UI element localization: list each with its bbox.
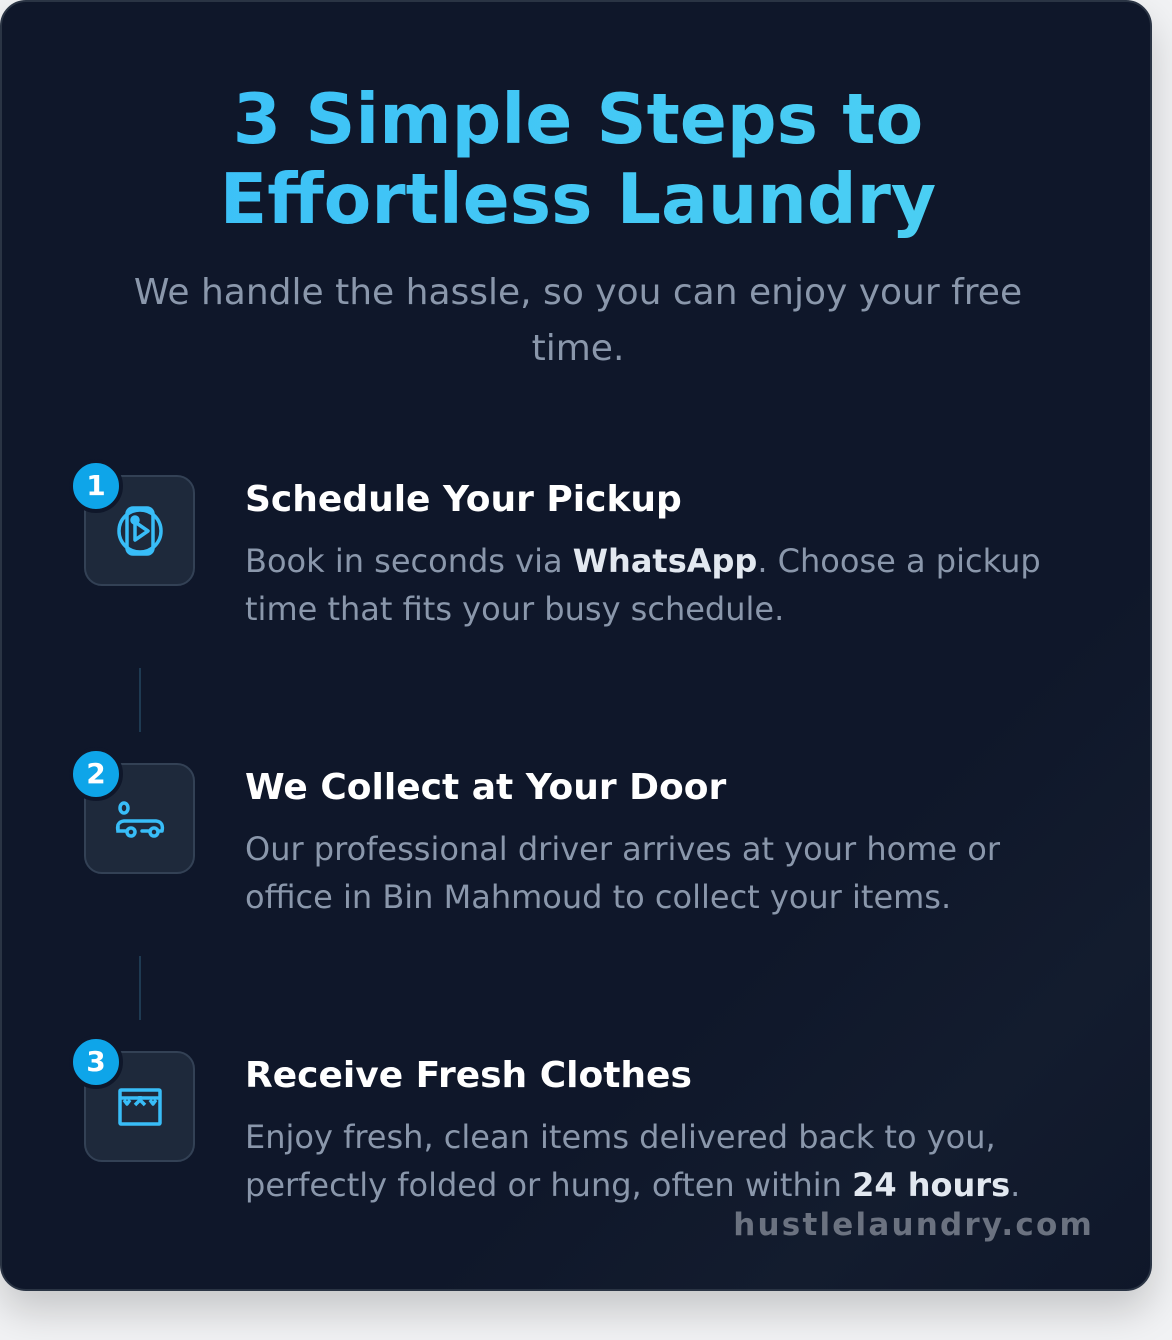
icon: wardrobe [84, 1051, 195, 1162]
text 1: Book in seconds via WhatsApp. Choose a pickup time that fits your busy schedule. [245, 542, 1041, 628]
badge 1 [69, 459, 123, 513]
badge 2: 2 [86, 757, 106, 790]
badge 1: 1 [86, 469, 106, 502]
heading 1: Schedule Your Pickup [245, 479, 682, 520]
heading 3: Receive Fresh Clothes [245, 1055, 692, 1096]
step 3 [73, 1039, 1020, 1204]
badge 3 [69, 1035, 123, 1089]
footer url: hustlelaundry.com [733, 1207, 1094, 1243]
title: 3 Simple Steps to [233, 79, 923, 160]
badge 3: 3 [86, 1045, 106, 1078]
heading 2: We Collect at Your Door [245, 767, 726, 808]
step 2 [73, 751, 1000, 916]
title: Effortless Laundry [220, 159, 936, 240]
connector 2 [139, 956, 141, 1020]
step 1 [73, 463, 1041, 628]
text 2: Our professional driver arrives at your home or office in Bin Mahmoud to collect your items. [245, 830, 1000, 916]
title [2, 80, 1154, 240]
icon: car [84, 763, 195, 874]
connector 1 [139, 668, 141, 732]
badge 2 [69, 747, 123, 801]
subtitle: We handle the hassle, so you can enjoy your free time. [134, 272, 1022, 369]
icon: phone [84, 475, 195, 586]
text 3: Enjoy fresh, clean items delivered back to you, perfectly folded or hung, often within 24 hours. [245, 1118, 1020, 1204]
